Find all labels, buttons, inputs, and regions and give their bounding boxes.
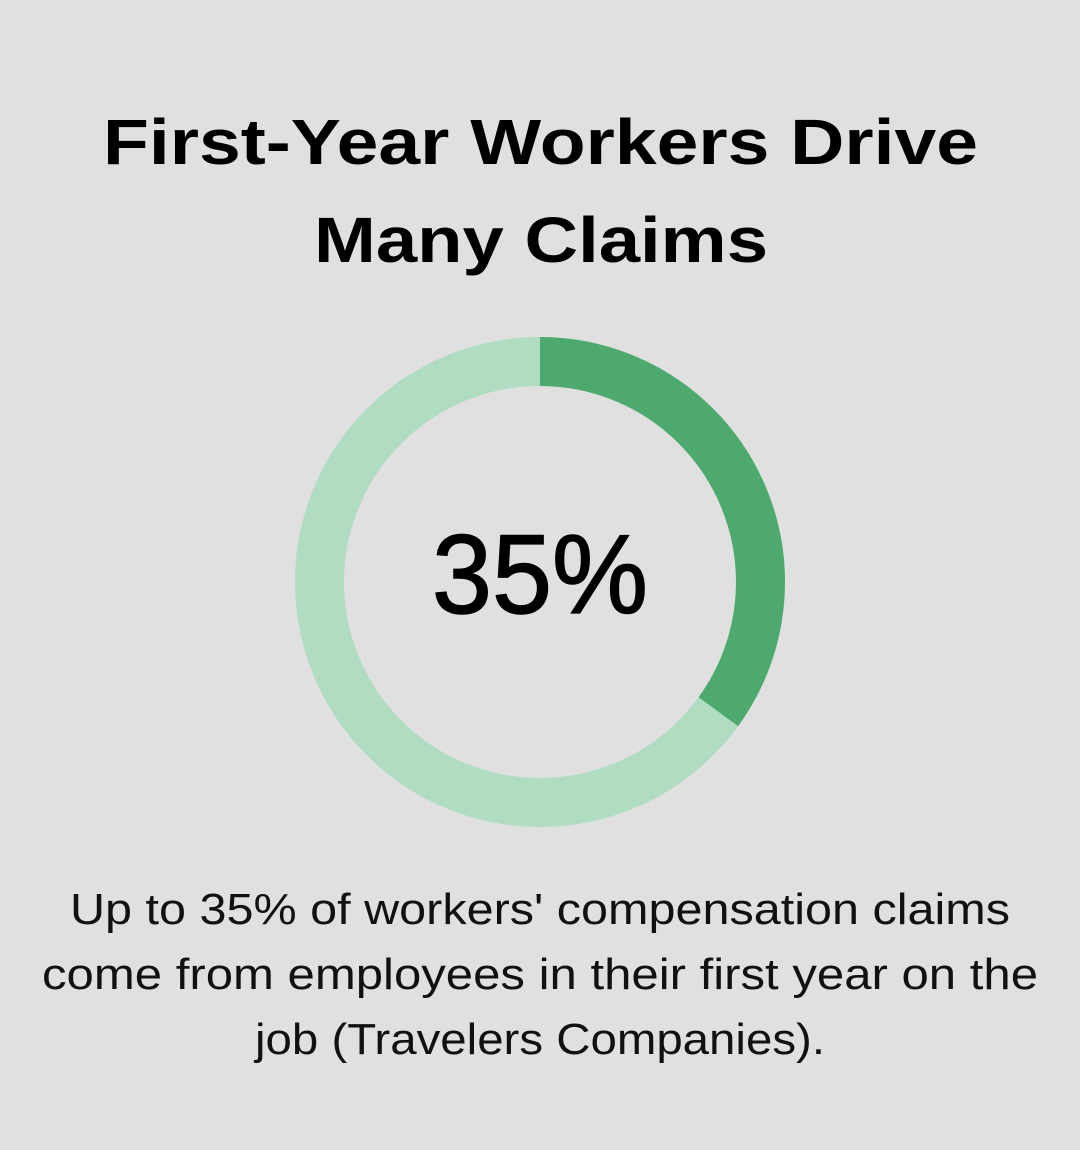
title: Many Claims [314, 204, 768, 276]
description text: come from employees in their first year on the [42, 950, 1038, 999]
title: First-Year Workers Drive [103, 106, 978, 178]
description text: Up to 35% of workers' compensation claims [70, 885, 1010, 934]
donut chart [320, 362, 760, 802]
center value: 35% [432, 512, 648, 637]
description text: job (Travelers Companies). [253, 1015, 825, 1064]
description text [42, 885, 1038, 1064]
title [103, 106, 978, 276]
